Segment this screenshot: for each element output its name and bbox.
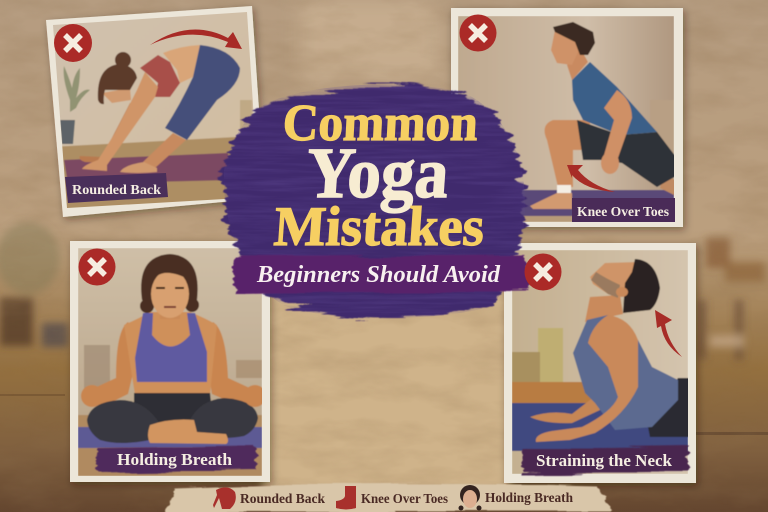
label [572, 198, 675, 222]
title: Yoga: Yoga [304, 133, 451, 213]
subtitle band [234, 255, 530, 294]
label [522, 447, 688, 474]
label: Holding Breath [117, 450, 233, 469]
legend band [165, 483, 612, 512]
legend item: knee over toes: Knee Over Toes [361, 492, 448, 507]
mistake badge [54, 24, 92, 62]
mistake badge [460, 14, 496, 52]
photo frame [46, 6, 265, 217]
illustration: man in lunge with knee past toes [458, 16, 676, 222]
legend item: rounded back: Rounded Back [240, 492, 325, 507]
label: Rounded Back [72, 182, 162, 197]
legend item: knee over toes [336, 486, 448, 510]
red arrow over back [150, 29, 242, 49]
legend item: holding breath: Holding Breath [485, 491, 573, 506]
mistake badge [78, 248, 116, 286]
title: Mistakes: Mistakes [272, 196, 486, 258]
illustration: seated woman holding breath [78, 248, 266, 476]
label [96, 446, 257, 472]
panel: straining the neck [504, 243, 696, 483]
label [65, 173, 168, 203]
title brush block [210, 70, 562, 330]
illustration: man in cobra straining neck [512, 250, 690, 474]
title: Common: Common [281, 95, 479, 152]
panel: rounded back [40, 5, 265, 217]
photo frame [451, 8, 683, 227]
badge for straining the neck [524, 254, 562, 290]
photo frame [504, 243, 696, 483]
subtitle: Beginners Should Avoid [256, 262, 501, 288]
panel: knee over toes [451, 8, 683, 227]
panel: holding breath [70, 241, 270, 482]
legend item: rounded back [213, 487, 325, 509]
label: Straining the Neck [536, 451, 673, 470]
photo frame [70, 241, 270, 482]
red arrow at knee [567, 165, 615, 192]
legend item: holding breath [458, 485, 573, 510]
footer legend [165, 483, 612, 512]
red arrow at neck [655, 310, 682, 357]
illustration: woman folding forward with rounded back [53, 12, 254, 208]
purple brush stroke [217, 81, 530, 322]
label: Knee Over Toes [577, 204, 669, 219]
